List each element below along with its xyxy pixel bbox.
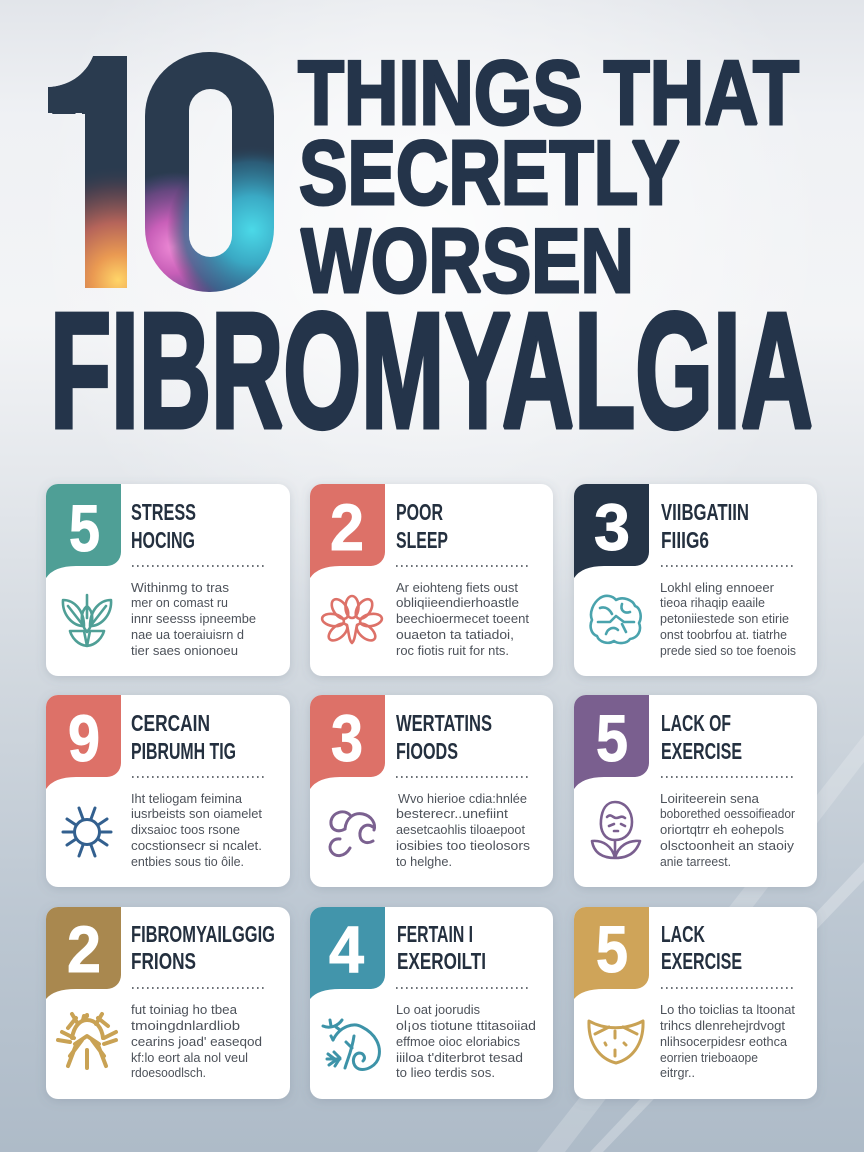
heading bbox=[131, 921, 275, 974]
heading bbox=[396, 499, 448, 553]
body text: eorrien trieboaope bbox=[660, 1050, 758, 1065]
body text: innr seesss ipneembe bbox=[131, 611, 256, 626]
heading: POOR bbox=[396, 499, 443, 525]
icon: citrus slice bbox=[589, 1021, 643, 1063]
number tab 5 bbox=[46, 484, 121, 578]
body text: tier saes onionoeu bbox=[131, 643, 238, 658]
body text: nlihsocerpidesr eothca bbox=[660, 1034, 788, 1049]
icon: brain bbox=[591, 596, 641, 643]
number tab 9 bbox=[46, 695, 121, 789]
body text: aesetcaohlis tiloaepoot bbox=[396, 822, 525, 837]
panel: card 9 bbox=[574, 907, 817, 1099]
body text: besterecr..unefiint bbox=[396, 806, 508, 821]
number tab 5: 5 bbox=[596, 701, 628, 775]
icon: sun bbox=[63, 808, 111, 856]
panel: card 8 bbox=[310, 907, 553, 1099]
body text: eitrgr.. bbox=[660, 1065, 695, 1080]
body text: iusrbeists son oiamelet bbox=[131, 806, 262, 821]
body text: onst toobrfou at. tiatrhe bbox=[660, 627, 787, 642]
number tab 2 bbox=[46, 907, 121, 999]
number tab 5: 5 bbox=[596, 912, 628, 986]
body text: anie tarreest. bbox=[660, 854, 731, 869]
body text: oriortqtrr eh eohepols bbox=[660, 822, 784, 837]
number tab 3 bbox=[574, 484, 649, 578]
heading: FRIONS bbox=[131, 948, 196, 974]
body text: iosibies too tieolosors bbox=[396, 838, 531, 853]
heading bbox=[661, 710, 742, 764]
body text: ouaeton ta tatiadoi, bbox=[396, 627, 514, 642]
body text: tmoingdnlardliob bbox=[131, 1018, 240, 1033]
title: secretly: SECRETLY bbox=[299, 123, 680, 224]
body text: boborethed oessoifieador bbox=[660, 806, 796, 821]
number tab 4: 4 bbox=[329, 912, 364, 986]
body text bbox=[660, 1002, 795, 1080]
number tab 9: 9 bbox=[68, 701, 100, 775]
body text: cocstionsecr si ncalet. bbox=[131, 838, 262, 853]
number tab 3: 3 bbox=[594, 490, 630, 564]
body text: dixsaioc toos rsone bbox=[131, 822, 240, 837]
title: big gradient number 10 bbox=[48, 52, 274, 292]
heading bbox=[397, 921, 486, 974]
body text bbox=[131, 791, 262, 869]
body text: Wvo hierioe cdia:hnlée bbox=[398, 791, 527, 806]
heading: EXEROILTI bbox=[397, 948, 486, 974]
icon: face with leaves bbox=[592, 802, 640, 858]
number tab 2: 2 bbox=[67, 912, 101, 986]
heading: LACK OF bbox=[661, 710, 731, 736]
heading bbox=[661, 921, 742, 974]
heading: SLEEP bbox=[396, 527, 448, 553]
heading: WERTATINS bbox=[396, 710, 492, 736]
body text: prede sied so toe foenois bbox=[660, 643, 796, 658]
body text: effmoe oioc eloriabics bbox=[396, 1034, 520, 1049]
icon: flower bbox=[321, 596, 383, 644]
body text bbox=[396, 1002, 536, 1080]
body text: petoniiestede son etirie bbox=[660, 611, 789, 626]
number tab 2: 2 bbox=[330, 490, 364, 564]
body text: to lieo terdis sos. bbox=[396, 1065, 495, 1080]
body text: obliqiieendierhoastle bbox=[396, 595, 519, 610]
number tab 5 bbox=[574, 695, 649, 789]
body text bbox=[131, 580, 256, 658]
body text: Loiriteerein sena bbox=[660, 791, 760, 806]
body text: iiiloa t'diterbrot tesad bbox=[396, 1050, 523, 1065]
number tab 3 bbox=[310, 695, 385, 789]
body text: Lo oat joorudis bbox=[396, 1002, 480, 1017]
body text bbox=[660, 791, 796, 869]
heading: FIBROMYAILGGIG bbox=[131, 921, 275, 947]
heading bbox=[131, 710, 236, 764]
heading: STRESS bbox=[131, 499, 196, 525]
heading bbox=[396, 710, 492, 764]
body text: Lo tho toiclias ta ltoonat bbox=[660, 1002, 795, 1017]
heading bbox=[661, 499, 749, 553]
panel: card 6 bbox=[574, 695, 817, 887]
body text: tieoa rihaqip eaaile bbox=[660, 595, 765, 610]
heading bbox=[131, 499, 196, 553]
body text: Withinmg to tras bbox=[131, 580, 230, 595]
number tab 4 bbox=[310, 907, 385, 999]
body text bbox=[660, 580, 796, 658]
icon: vine bbox=[323, 1020, 379, 1069]
body text: nae ua toeraiuisrn d bbox=[131, 627, 244, 642]
number tab 5 bbox=[574, 907, 649, 999]
number tab 3: 3 bbox=[331, 701, 363, 775]
body text: beechioermecet toeent bbox=[396, 611, 529, 626]
panel: card 4 bbox=[46, 695, 290, 887]
body text bbox=[396, 580, 529, 658]
body text: Ar eiohteng fiets oust bbox=[396, 580, 518, 595]
body text bbox=[396, 791, 531, 869]
heading: LACK bbox=[661, 921, 705, 947]
heading: VIIBGATIIN bbox=[661, 499, 749, 525]
panel: card 1 bbox=[46, 484, 290, 676]
body text: to helghe. bbox=[396, 854, 452, 869]
panel: card 2 bbox=[310, 484, 553, 676]
icon: burst sun bbox=[58, 1014, 116, 1068]
heading: EXERCISE bbox=[661, 738, 742, 764]
body text: kf:lo eort ala nol veul bbox=[131, 1050, 248, 1065]
heading: EXERCISE bbox=[661, 948, 742, 974]
panel: card 5 bbox=[310, 695, 553, 887]
body text: roc fiotis ruit for nts. bbox=[396, 643, 509, 658]
body text bbox=[131, 1002, 262, 1080]
heading: HOCING bbox=[131, 527, 195, 553]
body text: trihcs dlenrehejrdvogt bbox=[660, 1018, 785, 1033]
number tab 5: 5 bbox=[69, 491, 100, 565]
heading: FIIIG6 bbox=[661, 527, 709, 553]
heading: FIOODS bbox=[396, 738, 458, 764]
icon: swirls bbox=[330, 812, 375, 856]
heading: PIBRUMH TIG bbox=[131, 738, 236, 764]
body text: fut toiniag ho tbea bbox=[131, 1002, 238, 1017]
heading: FERTAIN I bbox=[397, 921, 473, 947]
number tab 2 bbox=[310, 484, 385, 578]
body text: olsctoonheit an staoiy bbox=[660, 838, 795, 853]
body text: cearins joad' easeqod bbox=[131, 1034, 262, 1049]
body text: Lokhl eling ennoeer bbox=[660, 580, 775, 595]
body text: ol¡os tiotune ttitasoiiad bbox=[396, 1018, 536, 1033]
icon: leaves bbox=[63, 595, 111, 646]
heading: CERCAIN bbox=[131, 710, 210, 736]
body text: rdoesoodlsch. bbox=[131, 1065, 206, 1080]
body text: Iht teliogam feimina bbox=[131, 791, 243, 806]
title: worsen: WORSEN bbox=[301, 211, 634, 312]
body text: entbies sous tio ôile. bbox=[131, 854, 244, 869]
panel: card 3 bbox=[574, 484, 817, 676]
body text: mer on comast ru bbox=[131, 595, 228, 610]
panel: card 7 bbox=[46, 907, 290, 1099]
